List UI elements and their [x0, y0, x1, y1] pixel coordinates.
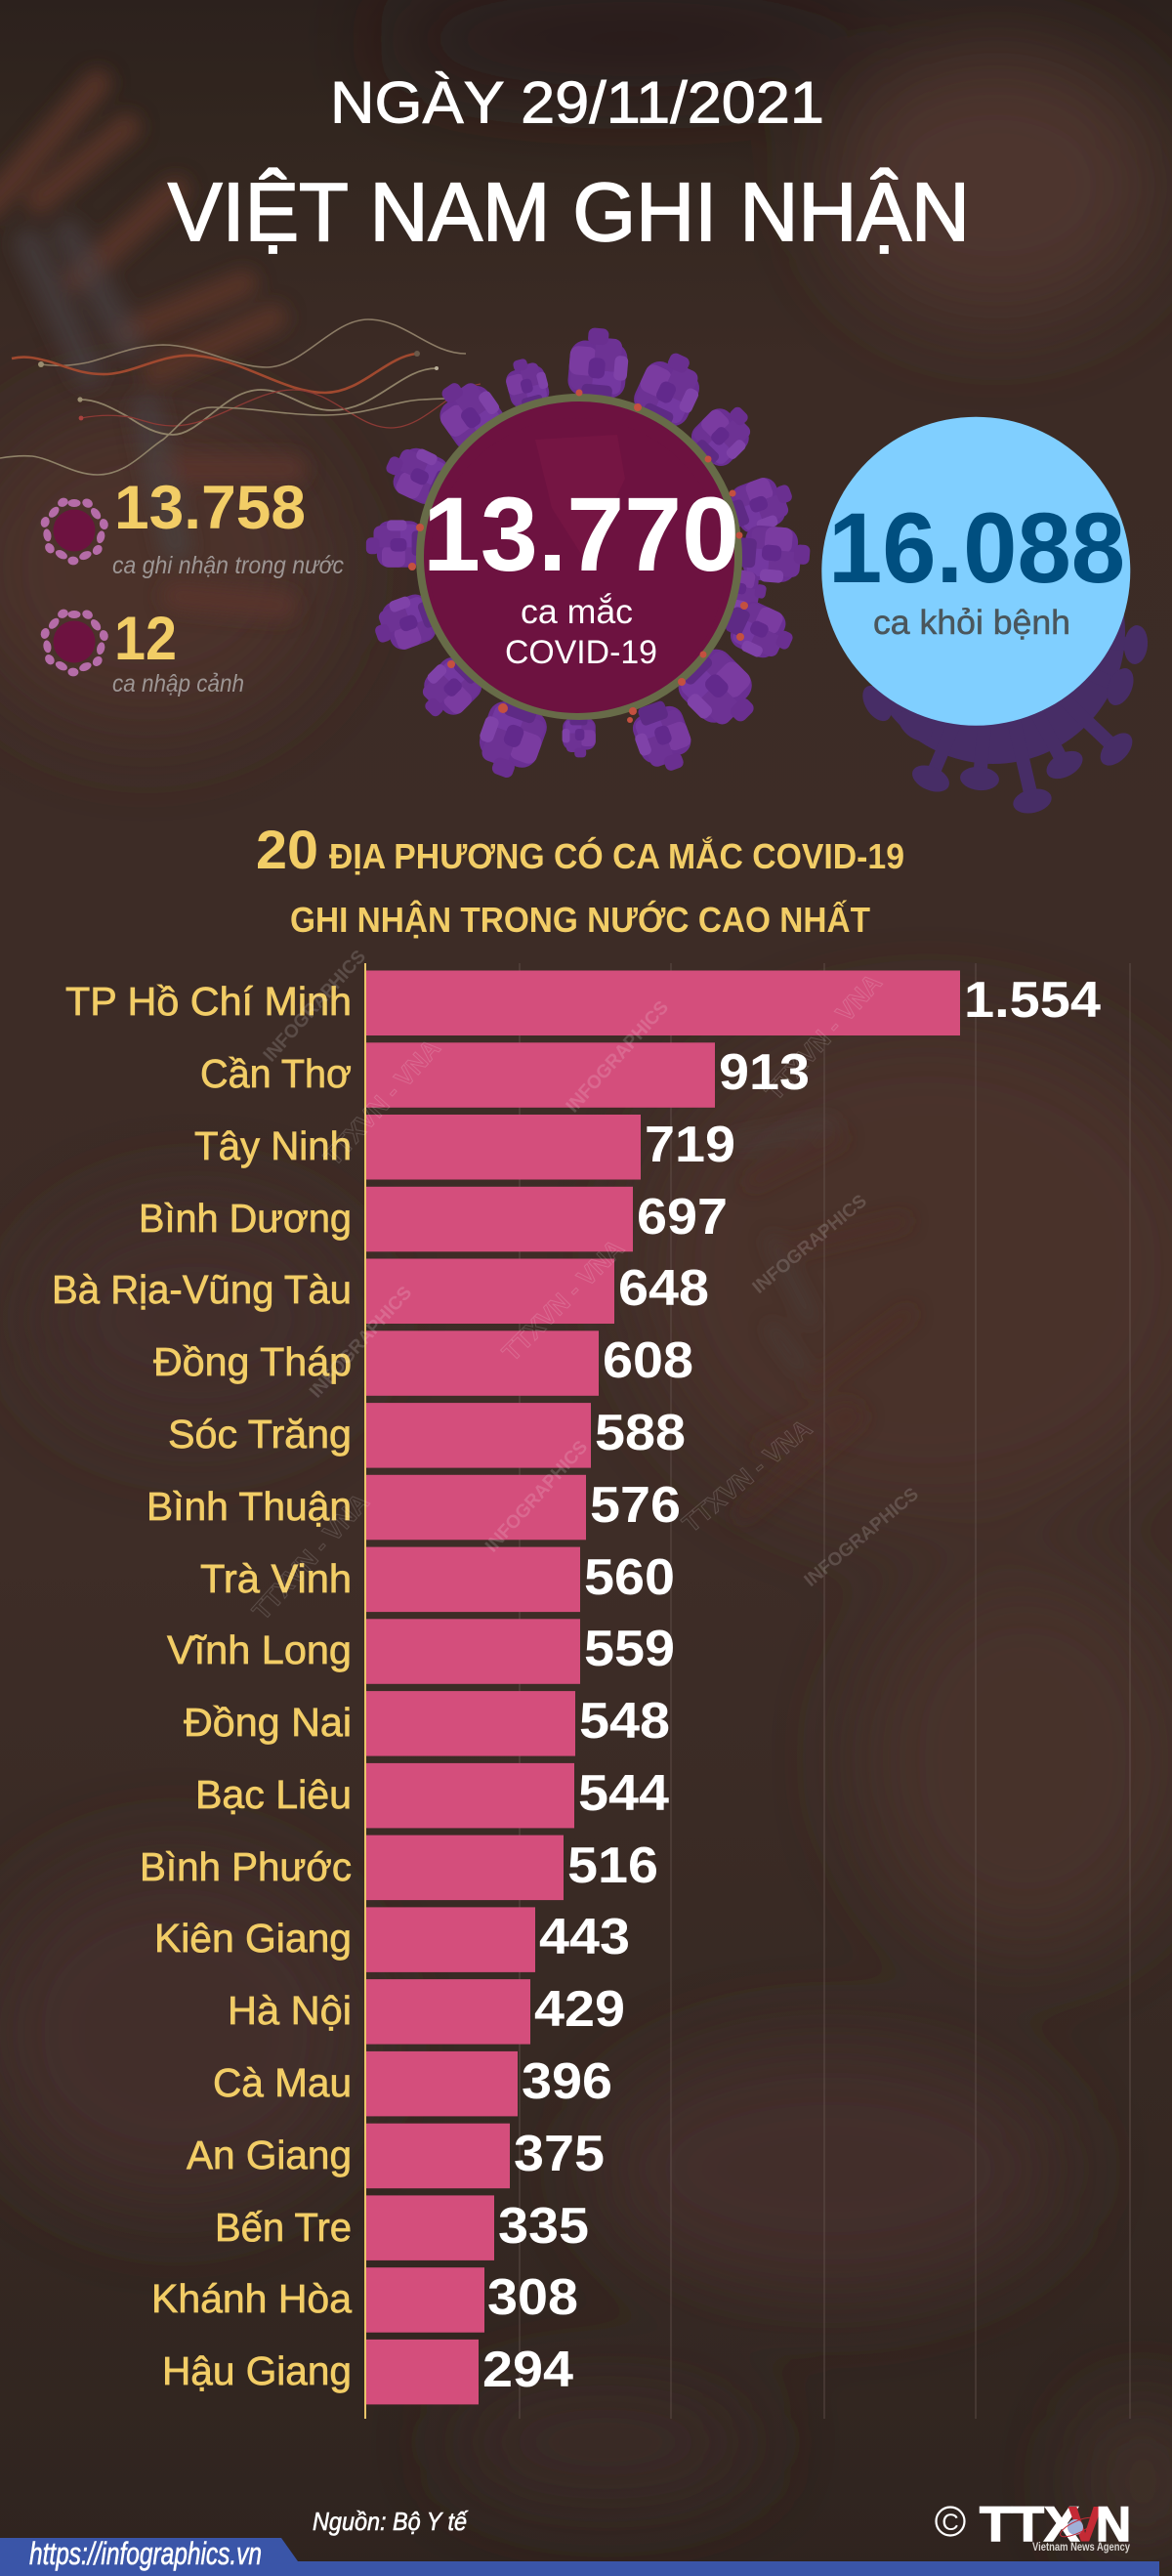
row: Khánh Hòa [151, 2267, 578, 2333]
row: Hà Nội: 429 [534, 1981, 625, 2038]
big stat: 16.088: 16.088 [828, 492, 1125, 604]
TTXVN logo: V [1068, 2497, 1103, 2552]
row: Đồng Nai: Đồng Nai [184, 1700, 352, 1745]
row: Bình Thuận: 576 [590, 1477, 681, 1534]
row: Bình Phước [140, 1836, 658, 1900]
row: Bến Tre [215, 2195, 589, 2260]
row: Vĩnh Long: 559 [584, 1621, 675, 1677]
small virus icon: domestic cases [39, 496, 109, 566]
watermarks: TTXVN - VNA [759, 967, 888, 1106]
row: Cần Thơ [200, 1042, 810, 1108]
row: Tây Ninh: Tây Ninh [194, 1123, 352, 1168]
row: Hậu Giang: 294 [482, 2342, 573, 2398]
watermarks: INFOGRAPHICS [306, 1283, 416, 1402]
row: Bạc Liêu [195, 1763, 669, 1828]
title date line: NGÀY 29/11/2021 [330, 70, 824, 135]
row: Trà Vinh: Trà Vinh [200, 1556, 352, 1601]
label: domestic cases: ca ghi nhận trong nước [112, 552, 344, 579]
row: Bạc Liêu: 544 [578, 1765, 669, 1822]
row: Sóc Trăng: Sóc Trăng [168, 1412, 352, 1457]
row: Bà Rịa-Vũng Tàu: Bà Rịa-Vũng Tàu [52, 1267, 352, 1312]
row: Bình Thuận [146, 1475, 681, 1540]
row: TP Hồ Chí Minh [65, 971, 1101, 1035]
row: An Giang: 375 [514, 2126, 605, 2182]
watermarks: INFOGRAPHICS [563, 997, 673, 1117]
chart heading: GHI NHẬN TRONG NƯỚC CAO NHẤT [290, 899, 870, 940]
watermarks: TTXVN - VNA [496, 1233, 630, 1367]
label: ca khỏi bệnh: ca khỏi bệnh [873, 604, 1070, 642]
row: Kiên Giang: Kiên Giang [154, 1916, 352, 1961]
row: Trà Vinh [200, 1547, 675, 1612]
row: Bình Dương: Bình Dương [139, 1196, 352, 1241]
row: Kiên Giang: 443 [539, 1909, 630, 1965]
footer url: https://infographics.vn [29, 2536, 262, 2571]
row: Trà Vinh: 560 [584, 1549, 675, 1606]
row: Hậu Giang: Hậu Giang [162, 2348, 352, 2393]
bar chart: 20 provinces [52, 971, 1101, 2404]
row: Tây Ninh: 719 [645, 1117, 735, 1173]
chart heading [256, 819, 904, 940]
blue-purple virus behind recovery circle [857, 500, 1150, 817]
row: Cà Mau [213, 2051, 612, 2116]
watermarks: INFOGRAPHICS [260, 947, 370, 1066]
watermarks: INFOGRAPHICS [481, 1437, 592, 1556]
label: imported cases: ca nhập cảnh [112, 670, 244, 697]
chart axis [364, 963, 366, 2419]
row: Bà Rịa-Vũng Tàu [52, 1258, 709, 1324]
row: Tây Ninh [194, 1115, 735, 1180]
row: An Giang: An Giang [187, 2133, 352, 2177]
chart heading: ĐỊA PHƯƠNG CÓ CA MẮC COVID-19 [329, 835, 904, 876]
row: Cà Mau: 396 [522, 2053, 612, 2110]
big stat: 13.770: 13.770 [423, 475, 739, 593]
row: Khánh Hòa: 308 [487, 2269, 578, 2326]
stat: 13.758: 13.758 [114, 474, 306, 542]
row: Kiên Giang [154, 1907, 630, 1972]
watermarks [246, 947, 923, 1626]
watermarks: INFOGRAPHICS [801, 1484, 923, 1591]
central virus illustration [366, 326, 812, 785]
row: Khánh Hòa: Khánh Hòa [151, 2276, 352, 2321]
row: An Giang [187, 2124, 605, 2188]
label: COVID-19: COVID-19 [505, 634, 657, 671]
row: Đồng Nai [184, 1691, 670, 1756]
stat: 12: 12 [114, 605, 177, 673]
footer bar [0, 2538, 1159, 2576]
row: Bình Phước: Bình Phước [140, 1844, 352, 1889]
source: Nguồn: Bộ Y tế [313, 2507, 468, 2536]
central maroon disc [430, 418, 725, 713]
watermarks: TTXVN - VNA [246, 1487, 375, 1626]
TTXVN logo: N [1096, 2497, 1131, 2552]
row: Bạc Liêu: Bạc Liêu [195, 1772, 352, 1817]
row: Hậu Giang [162, 2340, 573, 2404]
row: Bình Dương: 697 [637, 1189, 728, 1246]
watermarks: INFOGRAPHICS [749, 1191, 871, 1298]
chart gridlines [520, 963, 1130, 2419]
watermarks: TTXVN - VNA [677, 1414, 817, 1539]
row: Hà Nội: Hà Nội [228, 1988, 352, 2033]
chart heading: 20 [256, 819, 318, 880]
copyright symbol: C [942, 2510, 959, 2536]
decorative wavy lines [0, 319, 481, 475]
row: Đồng Tháp: Đồng Tháp [153, 1339, 352, 1384]
row: TP Hồ Chí Minh: TP Hồ Chí Minh [65, 979, 352, 1024]
main title: VIỆT NAM GHI NHẬN [168, 166, 970, 258]
small virus icon: imported cases [39, 608, 109, 677]
row: Bà Rịa-Vũng Tàu: 648 [618, 1260, 709, 1317]
row: Sóc Trăng [168, 1403, 686, 1468]
row: TP Hồ Chí Minh: 1.554 [964, 972, 1101, 1029]
row: Đồng Tháp: 608 [603, 1332, 693, 1389]
watermarks: TTXVN - VNA [317, 1033, 446, 1171]
row: Bình Dương [139, 1187, 728, 1251]
row: Bến Tre: Bến Tre [215, 2205, 352, 2250]
copyright symbol [936, 2507, 965, 2536]
TTXVN logo: TTX [980, 2497, 1079, 2552]
row: Bình Thuận: Bình Thuận [146, 1484, 352, 1529]
row: Cà Mau: Cà Mau [213, 2060, 352, 2105]
row: Bình Phước: 516 [567, 1837, 658, 1894]
row: Cần Thơ: 913 [719, 1044, 810, 1101]
row: Bến Tre: 335 [498, 2198, 589, 2255]
recovery circle [821, 417, 1130, 726]
TTXVN logo: Vietnam News Agency [1032, 2540, 1130, 2554]
row: Vĩnh Long [167, 1619, 675, 1684]
label: ca mắc: ca mắc [521, 593, 633, 631]
row: Cần Thơ: Cần Thơ [200, 1051, 352, 1096]
row: Sóc Trăng: 588 [595, 1405, 686, 1461]
TTXVN logo [980, 2497, 1131, 2554]
row: Vĩnh Long: Vĩnh Long [167, 1627, 352, 1672]
row: Đồng Tháp [153, 1330, 693, 1396]
row: Hà Nội [228, 1979, 625, 2045]
row: Đồng Nai: 548 [579, 1693, 670, 1750]
